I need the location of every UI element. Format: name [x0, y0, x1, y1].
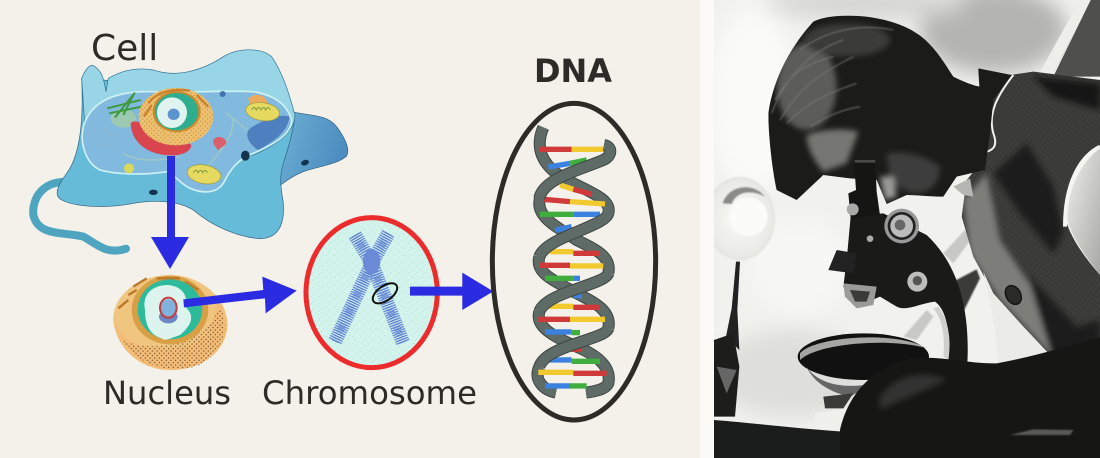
- top right corner dark wall: [1053, 0, 1100, 77]
- cell lower body: [57, 78, 295, 239]
- front strands: [539, 145, 610, 367]
- label: Chromosome: Chromosome: [262, 374, 477, 412]
- hand and forearm: [840, 337, 1100, 458]
- sleeve trim: [1065, 147, 1100, 227]
- white margin of photo: [700, 0, 714, 458]
- base pairs: [538, 149, 607, 386]
- label: Nucleus: Nucleus: [103, 374, 231, 412]
- face tones: [807, 129, 940, 200]
- photo wall: [714, 0, 1100, 458]
- shirt button: [1002, 283, 1025, 307]
- golgi red: [213, 137, 227, 151]
- label: DNA: DNA: [534, 52, 612, 90]
- microscope: [828, 159, 968, 364]
- red endoplasmic reticulum: [131, 121, 191, 155]
- cell nucleus: [139, 88, 213, 145]
- oval outline: [492, 103, 656, 420]
- arrow: chromosome to DNA: [410, 273, 493, 310]
- microscope mirror: [798, 333, 929, 408]
- eyepiece tube: [848, 159, 880, 218]
- background stripes: [903, 230, 980, 340]
- black marker ellipse: [369, 279, 401, 307]
- shirt: [957, 67, 1100, 360]
- mitochondrion lower: [186, 162, 222, 186]
- white collar trim: [982, 75, 1013, 153]
- chloroplast: [107, 93, 142, 128]
- focus knob: [884, 209, 919, 243]
- cell upper body: [82, 50, 295, 170]
- arrow: cell to nucleus: [151, 156, 189, 269]
- cell illustration: [33, 50, 348, 251]
- objective cluster: [828, 250, 857, 273]
- dark vacuole: [247, 116, 289, 150]
- upper arm skin: [1067, 148, 1100, 275]
- desk lamp: [705, 177, 775, 417]
- cell right lobe: [273, 112, 348, 185]
- cell cytoplasm: [82, 91, 292, 192]
- chromosome circle: [306, 218, 437, 368]
- desk edge glow: [815, 408, 847, 432]
- back strands: [538, 127, 609, 393]
- head and hair: [763, 10, 1017, 210]
- small organelles: [124, 91, 310, 195]
- chromosome X: [335, 233, 403, 343]
- golgi lines: [88, 123, 118, 148]
- photo: scientist at microscope: [714, 0, 1100, 458]
- collar bit: [953, 178, 973, 197]
- small nucleus illustration: [113, 275, 227, 370]
- desk: [714, 420, 843, 458]
- cell tail: [33, 182, 126, 251]
- arrow: nucleus to chromosome: [183, 277, 297, 313]
- second knob: [907, 272, 927, 292]
- mitochondrion upper: [245, 95, 281, 123]
- microscope arm: [843, 213, 968, 364]
- label: Cell: Cell: [91, 28, 158, 69]
- DNA double helix in ellipse: [492, 103, 656, 420]
- hair strands: [772, 28, 893, 127]
- hair light zones: [777, 23, 890, 130]
